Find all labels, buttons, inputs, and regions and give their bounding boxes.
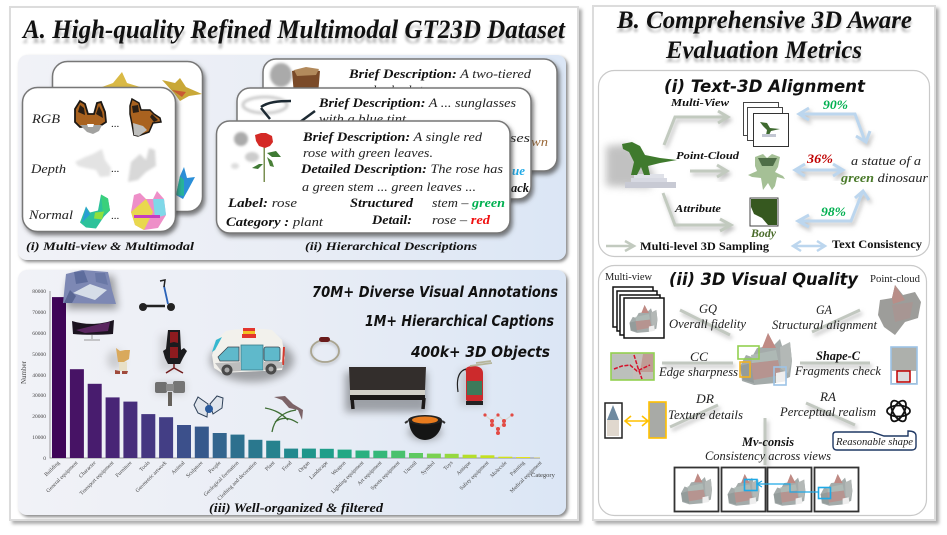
label: GQ: Overall fidelity	[669, 317, 746, 331]
callout: reasonable shape	[833, 431, 916, 450]
icon: building model	[63, 270, 118, 309]
text: prompt	[840, 153, 929, 185]
label: multi-view input: Multi-view	[605, 272, 652, 283]
label: Mv-consis: Mv-consis	[741, 435, 794, 449]
bar chart: objects per category: Weapon	[331, 460, 348, 477]
title: panel B	[616, 7, 912, 64]
icon: scooter	[139, 280, 175, 311]
icon: dinosaur on pedestal	[606, 142, 677, 188]
score: 90 percent: 90%	[823, 97, 848, 112]
bar chart: objects per category: Clothing and decoration	[217, 460, 259, 502]
bar chart: objects per category: Landscape	[309, 460, 330, 481]
icon: fox normal views: ...	[111, 210, 120, 222]
caption: hierarchical descriptions: (ii) Hierarchical Descriptions	[305, 239, 477, 253]
label: DR: Texture details	[668, 408, 743, 422]
title: panel B reflection: Evaluation Metrics	[665, 41, 862, 68]
bar chart: objects per category: 60000	[32, 331, 46, 337]
bar chart: objects per category: Category	[531, 472, 556, 479]
text: brief description: rose with green leaves.	[303, 145, 433, 160]
icon: fox depth views	[75, 148, 156, 182]
text: brief description: Brief Description: A single red	[302, 129, 483, 144]
title: panel B reflection	[616, 11, 912, 68]
label: Shape-C	[794, 349, 881, 378]
bar chart: objects per category: 0	[43, 456, 46, 462]
icon: sledgehammer	[155, 381, 185, 406]
label: GA: Structural alignment	[772, 318, 878, 332]
text: detailed description: a green stem ... green leaves ...	[302, 179, 476, 194]
label: Normal: Normal	[28, 207, 73, 222]
bar chart: objects per category: 30000	[32, 393, 46, 399]
label: point-cloud: Point-Cloud	[676, 150, 740, 162]
icon: point cloud castle	[878, 285, 921, 335]
label: GQ: GQ	[699, 302, 717, 316]
bar chart: objects per category: Geometric artwork	[135, 460, 169, 494]
bar chart: objects per category: Food	[281, 460, 294, 472]
bar chart: objects per category: Plant	[264, 460, 277, 472]
icon: butterfly	[194, 396, 223, 417]
text: category: Category : plant	[226, 214, 323, 229]
icon: fire extinguisher	[457, 361, 492, 406]
arrow: attribute sampling	[663, 193, 731, 231]
icon: stacked view frames	[744, 102, 788, 146]
bar chart: objects per category: Character	[78, 460, 98, 480]
bar chart: objects per category: 50000	[32, 352, 46, 358]
bar chart: objects per category: Transport equipment	[79, 460, 116, 497]
bar chart: objects per category: 80000	[32, 289, 46, 295]
label: multi-view: Multi-View	[670, 97, 730, 109]
card: middle description: ack	[511, 181, 530, 195]
card: back description: wooden basket	[349, 83, 423, 97]
bar chart: objects per category: Art equipment	[357, 460, 384, 487]
text: structured detail: stem – green	[432, 195, 505, 210]
heading: 3D visual quality: (ii) 3D Visual Quality	[669, 270, 859, 290]
panel: B. evaluation metrics	[593, 6, 935, 520]
legend: multi-level 3D sampling: Multi-level 3D Sampling	[640, 239, 769, 253]
text: detailed description: Detailed Description: The rose has	[300, 161, 503, 176]
bar chart: objects per category: Furniture	[115, 460, 134, 479]
caption: multi-view and multimodal: (i) Multi-view & Multimodal	[26, 239, 195, 253]
text: structured detail	[350, 195, 505, 227]
bar chart: objects per category: Animal	[171, 460, 187, 476]
card: middle description	[237, 88, 531, 199]
text: structured detail: Detail:	[371, 212, 412, 227]
text: detailed description	[300, 161, 503, 194]
card: back description: wn	[531, 135, 548, 149]
label: RA: RA	[819, 390, 836, 404]
card: front description	[216, 121, 510, 233]
icon: center castle with highlights	[738, 333, 792, 385]
label: Mv-consis	[705, 435, 831, 463]
bar chart: objects per category: Number	[20, 360, 28, 384]
panel: text-3D alignment	[598, 70, 930, 256]
card: back description	[263, 59, 557, 171]
icon: consistency view frames	[674, 468, 858, 512]
label: Mv-consis: Consistency across views	[705, 449, 831, 463]
label: point-cloud input: Point-cloud	[870, 274, 921, 285]
bar chart: objects per category: People	[208, 460, 223, 475]
score: 36 percent: 36%	[806, 151, 833, 166]
bar chart: objects per category: 40000	[32, 373, 46, 379]
bar chart: objects per category	[20, 289, 556, 502]
stat: captions: 1M+ Hierarchical Captions	[365, 312, 554, 330]
icon: minibus	[210, 328, 294, 382]
card: back multi-view	[52, 62, 202, 212]
bar chart: objects per category: Organ	[298, 460, 312, 474]
label: Depth: Depth	[30, 161, 66, 176]
label: GA	[772, 303, 878, 332]
score: 98 percent: 98%	[821, 204, 846, 219]
panel: descriptions background	[18, 55, 566, 260]
arrow: text consistency bottom	[798, 191, 869, 227]
card: middle description: Brief Description: A ... sunglasses	[318, 96, 516, 110]
stat: visual annotations: 70M+ Diverse Visual Annotations	[312, 283, 558, 301]
text: label: Label: rose	[227, 195, 297, 210]
card: middle description: ue	[512, 164, 525, 178]
panel: well-organized chart	[18, 270, 566, 515]
title: panel A reflection: A. High-quality Refined Multimodal GT23D Dataset	[22, 20, 565, 49]
icon: fox depth views: ...	[111, 163, 120, 175]
icon: cartoon cat	[107, 348, 130, 374]
label: RA	[779, 390, 876, 419]
arrow: multi-view sampling	[664, 111, 728, 145]
title: panel B: B. Comprehensive 3D Aware	[616, 7, 912, 34]
card: middle description: with a blue tint	[319, 112, 407, 126]
text: structured detail: Structured	[350, 195, 414, 210]
panel: A. dataset	[10, 7, 578, 520]
bar chart: objects per category: Molecule	[489, 460, 509, 479]
icon: cooking pot	[405, 415, 445, 440]
arrow: text consistency top	[799, 108, 870, 142]
bar chart: objects per category: Lighting equipment	[330, 460, 366, 495]
bar chart: objects per category: Medical equipment	[509, 460, 544, 495]
stat: objects: 400k+ 3D Objects	[410, 343, 550, 361]
label: GQ	[669, 302, 746, 331]
bar chart: objects per category: Symbol	[420, 460, 437, 477]
label: RGB: RGB	[31, 111, 60, 126]
bar chart: objects per category: Sports equipment	[370, 460, 402, 492]
arrow: point-cloud sampling	[690, 165, 727, 177]
bar chart: objects per category: 70000	[32, 310, 46, 316]
label: body: Body	[750, 228, 777, 240]
caption: well-organized: (iii) Well-organized & filtered	[209, 500, 384, 515]
connector lines	[662, 310, 870, 465]
icon: molecule	[483, 413, 514, 435]
text: prompt: green dinosaur	[840, 170, 929, 185]
callout: reasonable shape: Reasonable shape	[835, 437, 913, 448]
bar chart: objects per category: 20000	[32, 414, 46, 420]
bar chart: objects per category: Safety equipment	[458, 459, 491, 492]
bar chart: objects per category: Utensil	[403, 460, 419, 476]
icon: gaming chair	[160, 330, 187, 373]
legend: text consistency	[793, 237, 922, 251]
icon: fox RGB views	[75, 99, 161, 136]
label: Shape-C: Shape-C	[816, 349, 861, 363]
label: RA: Perceptual realism	[779, 405, 876, 419]
icon: OpenAI knot logo	[887, 398, 910, 424]
icon: rose	[231, 132, 281, 182]
bar chart: objects per category: Painting	[509, 460, 527, 477]
icon: lily plant	[265, 396, 303, 432]
arrow: text consistency middle	[795, 164, 843, 176]
icon: edge crop	[611, 353, 654, 380]
label: CC: Edge sharpness	[658, 365, 738, 379]
icon: fox normal views	[80, 191, 166, 230]
icon: piano	[345, 367, 427, 412]
legend: text consistency: Text Consistency	[832, 237, 922, 251]
bar chart: objects per category: Antique	[456, 460, 473, 477]
text: brief description	[302, 129, 483, 160]
bar chart: objects per category: Building	[44, 460, 62, 478]
label: attribute: Attribute	[674, 203, 721, 215]
label: CC	[658, 350, 738, 379]
bar chart: objects per category: Toys	[443, 460, 454, 472]
heading: text-3D alignment: (i) Text-3D Alignment	[664, 77, 866, 97]
icon: ring	[311, 337, 339, 364]
label: CC: CC	[690, 350, 709, 364]
label: DR	[668, 392, 743, 422]
bar chart: objects per category: 10000	[32, 435, 46, 441]
title: panel B reflection: B. Comprehensive 3D Aware	[616, 11, 912, 38]
bar chart: objects per category: Geological formation	[202, 459, 241, 498]
bar chart: objects per category: Sculpture	[185, 460, 205, 479]
label: Shape-C: Fragments check	[794, 364, 881, 378]
card: back description: Brief Description: A two-tiered	[348, 67, 532, 81]
icon: fragments crop	[891, 347, 917, 384]
text: structured detail: rose – red	[432, 212, 491, 227]
bar chart: objects per category: Tools	[139, 460, 151, 473]
icon: multi-view stack	[613, 287, 664, 338]
icon: curved monitor	[72, 320, 114, 340]
title: panel A: A. High-quality Refined Multimodal GT23D Dataset	[21, 15, 566, 44]
icon: point cloud creature	[748, 154, 785, 190]
label: GA: GA	[816, 303, 832, 317]
icon: fox RGB views: ...	[111, 118, 120, 130]
panel: 3D visual quality	[598, 266, 926, 516]
text: prompt: a statue of a	[851, 153, 922, 168]
card: middle description: ses	[510, 131, 530, 145]
label: DR: DR	[695, 392, 714, 406]
icon: tower crop comparison	[605, 402, 666, 438]
bar chart: objects per category: General equipment	[45, 460, 80, 494]
title: panel B: Evaluation Metrics	[665, 37, 862, 64]
card: front multi-view	[22, 88, 176, 232]
icon: body attribute crop	[750, 198, 778, 226]
